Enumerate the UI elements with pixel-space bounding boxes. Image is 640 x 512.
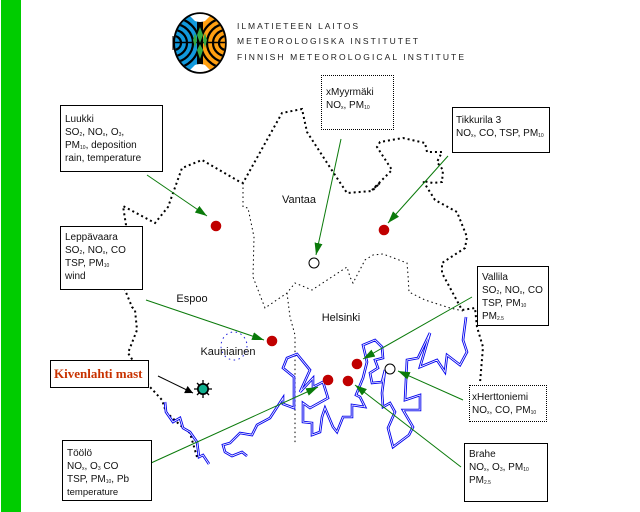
box: Vallila: TSP, PM10 — [482, 298, 526, 309]
box: Brahe — [464, 443, 548, 502]
box: Vallila: PM2.5 — [482, 311, 504, 322]
box: Leppävaara — [60, 226, 143, 290]
box: Herttoniemi: NOx, CO, PM10 — [472, 405, 536, 416]
arrow: Brahe — [355, 385, 461, 467]
green sidebar — [1, 0, 21, 512]
box: Myyrmäki: NOx, PM10 — [326, 100, 370, 111]
logo text: METEOROLOGISKA INSTITUTET — [237, 36, 418, 46]
box: Leppävaara: wind — [65, 271, 86, 282]
box: Brahe: Brahe — [469, 449, 496, 460]
box: Herttoniemi: xHerttoniemi — [472, 392, 528, 403]
icon: mast — [194, 380, 212, 398]
box: Tikkurila 3: NOx, CO, TSP, PM10 — [456, 128, 544, 139]
place labels: Kauniainen — [200, 346, 256, 358]
box: Vallila: Vallila — [482, 272, 508, 283]
box: Luukki: PM10, deposition — [65, 140, 137, 151]
Kauniainen boundary — [221, 332, 247, 360]
place labels: Espoo — [176, 293, 208, 305]
place labels: Helsinki — [322, 312, 360, 324]
open station circles — [309, 258, 395, 374]
coastline — [165, 317, 467, 464]
box: Luukki: Luukki — [65, 114, 94, 125]
logo text — [237, 21, 464, 62]
logo — [172, 12, 227, 74]
logo text: ILMATIETEEN LAITOS — [237, 21, 358, 31]
place labels: Vantaa — [282, 194, 317, 206]
arrow: Tikkurila — [388, 156, 448, 223]
box: Brahe: NOx, O3, PM10 — [469, 462, 529, 473]
logo text: FINNISH METEOROLOGICAL INSTITUTE — [237, 52, 464, 62]
place labels — [176, 194, 360, 358]
outer municipal boundary — [123, 109, 483, 457]
map — [122, 12, 484, 468]
box: Leppävaara: TSP, PM10 — [65, 258, 109, 269]
station dots — [211, 221, 389, 386]
arrow: Töölö — [151, 387, 318, 463]
arrow: Kivenlahti mast — [158, 376, 193, 393]
box: Luukki: rain, temperature — [65, 153, 141, 164]
arrow: Vallila — [363, 297, 472, 359]
box: Tikkurila 3 — [452, 107, 550, 153]
box: Myyrmäki — [321, 75, 394, 130]
box: Leppävaara: Leppävaara — [65, 232, 118, 243]
box: Töölö: Töölö — [67, 448, 92, 459]
box: Töölö: TSP, PM10, Pb — [67, 474, 129, 485]
box: Töölö: NOx, O3 CO — [67, 461, 118, 472]
box: Vallila: SO2, NOx, CO — [482, 285, 543, 296]
box: Töölö: temperature — [67, 487, 118, 498]
box: Kivenlahti mast — [50, 360, 149, 388]
box: Luukki — [60, 105, 163, 172]
box: Herttoniemi — [469, 385, 547, 422]
arrow: Herttoniemi — [398, 371, 463, 400]
box: Tikkurila 3: Tikkurila 3 — [456, 115, 501, 126]
arrow: Leppävaara — [146, 300, 264, 340]
inner municipal boundaries — [243, 183, 463, 443]
box: Luukki: SO2, NOx, O3, — [65, 127, 124, 138]
arrow: Luukki — [147, 175, 207, 216]
box: Brahe: PM2.5 — [469, 475, 491, 486]
box: Leppävaara: SO2, NOx, CO — [65, 245, 126, 256]
box: Kivenlahti mast: Kivenlahti mast — [54, 366, 142, 381]
box: Myyrmäki: xMyyrmäki — [326, 87, 374, 98]
box: Töölö — [62, 440, 152, 501]
arrow: Myyrmäki — [316, 139, 341, 255]
box: Vallila — [477, 266, 549, 326]
